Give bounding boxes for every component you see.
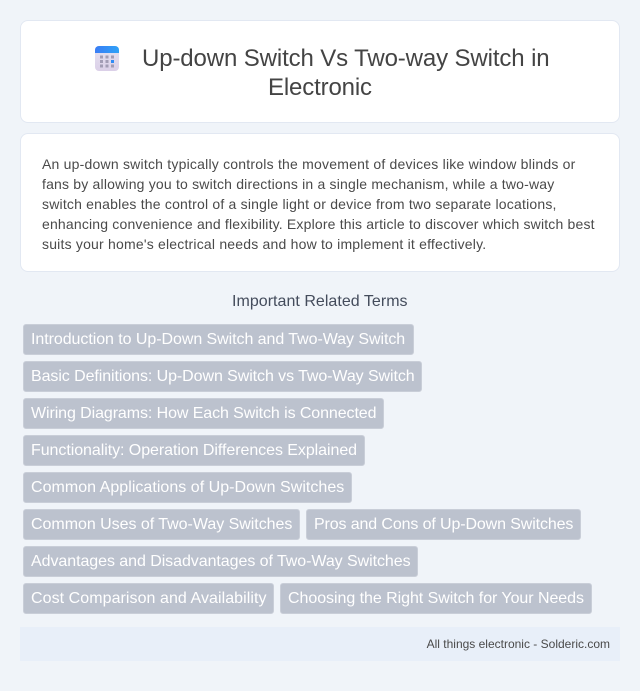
tag: functionality — [23, 435, 365, 466]
tag: advantages — [23, 546, 418, 577]
tag: introduction: Introduction to Up-Down Switch and Two-Way Switch — [31, 331, 405, 348]
title — [142, 45, 550, 101]
text block: intro: switch enables the control of a single light or device from two separate locations, — [42, 196, 557, 212]
footer text: All things electronic - Solderic.com — [427, 637, 610, 651]
tag: common applications — [23, 472, 352, 503]
tag: cost comparison — [23, 583, 274, 614]
tag: pros and cons: Pros and Cons of Up-Down Switches — [314, 516, 573, 533]
tag: common uses — [23, 509, 300, 540]
tag: choosing: Choosing the Right Switch for Your Needs — [288, 590, 584, 607]
tag: common uses: Common Uses of Two-Way Switches — [31, 516, 292, 533]
tag: cost comparison: Cost Comparison and Availability — [31, 590, 267, 607]
tag: functionality: Functionality: Operation Differences Explained — [31, 442, 357, 459]
heading: important related terms: Important Related Terms — [232, 293, 408, 310]
panel: title card — [20, 20, 620, 123]
text block: intro: An up-down switch typically controls the movement of devices like window blinds or — [42, 156, 576, 172]
panel: intro text card — [20, 133, 620, 272]
footer — [20, 627, 620, 661]
text block: intro: fans by allowing you to switch directions in a single mechanism, while a two-way — [42, 176, 554, 192]
text block: intro — [42, 156, 595, 252]
icon: calendar — [95, 46, 119, 71]
text block: intro: enhancing convenience and flexibility. Explore this article to discover which switch best — [42, 216, 595, 232]
text block: intro: suits your home's electrical needs and how to implement it effectively. — [42, 236, 486, 252]
tag: pros and cons — [306, 509, 581, 540]
tag: introduction — [23, 324, 414, 355]
tag: wiring diagrams — [23, 398, 384, 429]
tag: common applications: Common Applications of Up-Down Switches — [31, 479, 344, 496]
tag: wiring diagrams: Wiring Diagrams: How Each Switch is Connected — [31, 405, 376, 422]
tag: choosing — [280, 583, 592, 614]
title: Electronic — [268, 74, 372, 101]
tag: basic definitions — [23, 361, 422, 392]
tag: advantages: Advantages and Disadvantages of Two-Way Switches — [31, 553, 411, 570]
tag: basic definitions: Basic Definitions: Up-Down Switch vs Two-Way Switch — [31, 368, 415, 385]
title: Up-down Switch Vs Two-way Switch in — [142, 45, 550, 72]
